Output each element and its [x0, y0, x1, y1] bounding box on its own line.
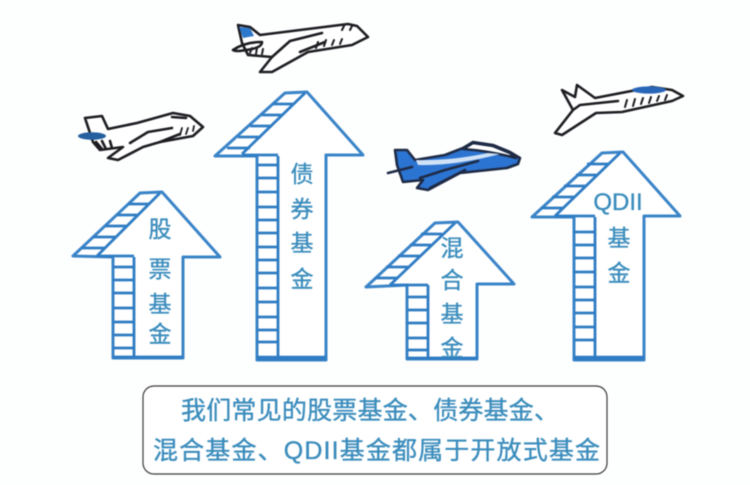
label: bond fund: 基 — [290, 230, 314, 256]
arrow outline: hybrid fund — [366, 222, 514, 359]
label: QDII fund: 金 — [608, 260, 630, 286]
label: stock fund: 金 — [148, 321, 172, 347]
arrow group: hybrid fund — [366, 222, 514, 361]
label: stock fund: 票 — [148, 256, 172, 282]
label: hybrid fund: 混 — [440, 235, 464, 261]
arrow outline: QDII fund — [532, 152, 680, 360]
icon: white jet with blue canopy — [555, 85, 683, 135]
label: bond fund: 债 — [290, 161, 314, 187]
base: bond fund — [257, 356, 326, 360]
callout box — [143, 386, 607, 474]
ladder: hybrid fund — [375, 223, 477, 359]
ladder: stock fund — [82, 193, 183, 358]
callout text: 我们常见的股票基金、债券基金、 — [181, 397, 559, 425]
label: QDII fund: 基 — [608, 225, 630, 251]
label: stock fund: 基 — [148, 291, 172, 317]
label: hybrid fund: 合 — [440, 267, 464, 293]
icon: white plane with blue stabilizer — [78, 113, 203, 160]
label: hybrid fund: 基 — [440, 301, 464, 327]
ladder: QDII fund — [541, 153, 620, 360]
callout text: 混合基金、QDII基金都属于开放式基金 — [153, 437, 600, 465]
base: QDII fund — [574, 356, 644, 360]
label: hybrid fund: 金 — [440, 335, 464, 361]
icon: blue plane — [388, 142, 520, 190]
arrow group: QDII fund — [532, 152, 680, 360]
icon: white plane with blue tail — [233, 24, 368, 72]
arrow group: stock fund — [73, 192, 220, 358]
ladder: bond fund — [227, 93, 305, 360]
label: stock fund: 股 — [148, 216, 172, 242]
arrow outline: bond fund — [215, 92, 363, 360]
label: bond fund: 券 — [290, 196, 314, 222]
arrow outline: stock fund — [73, 192, 220, 358]
label: bond fund: 金 — [290, 266, 314, 292]
callout frame — [143, 386, 607, 474]
arrow group: bond fund — [215, 92, 363, 360]
label: QDII fund: QDII — [593, 189, 643, 216]
